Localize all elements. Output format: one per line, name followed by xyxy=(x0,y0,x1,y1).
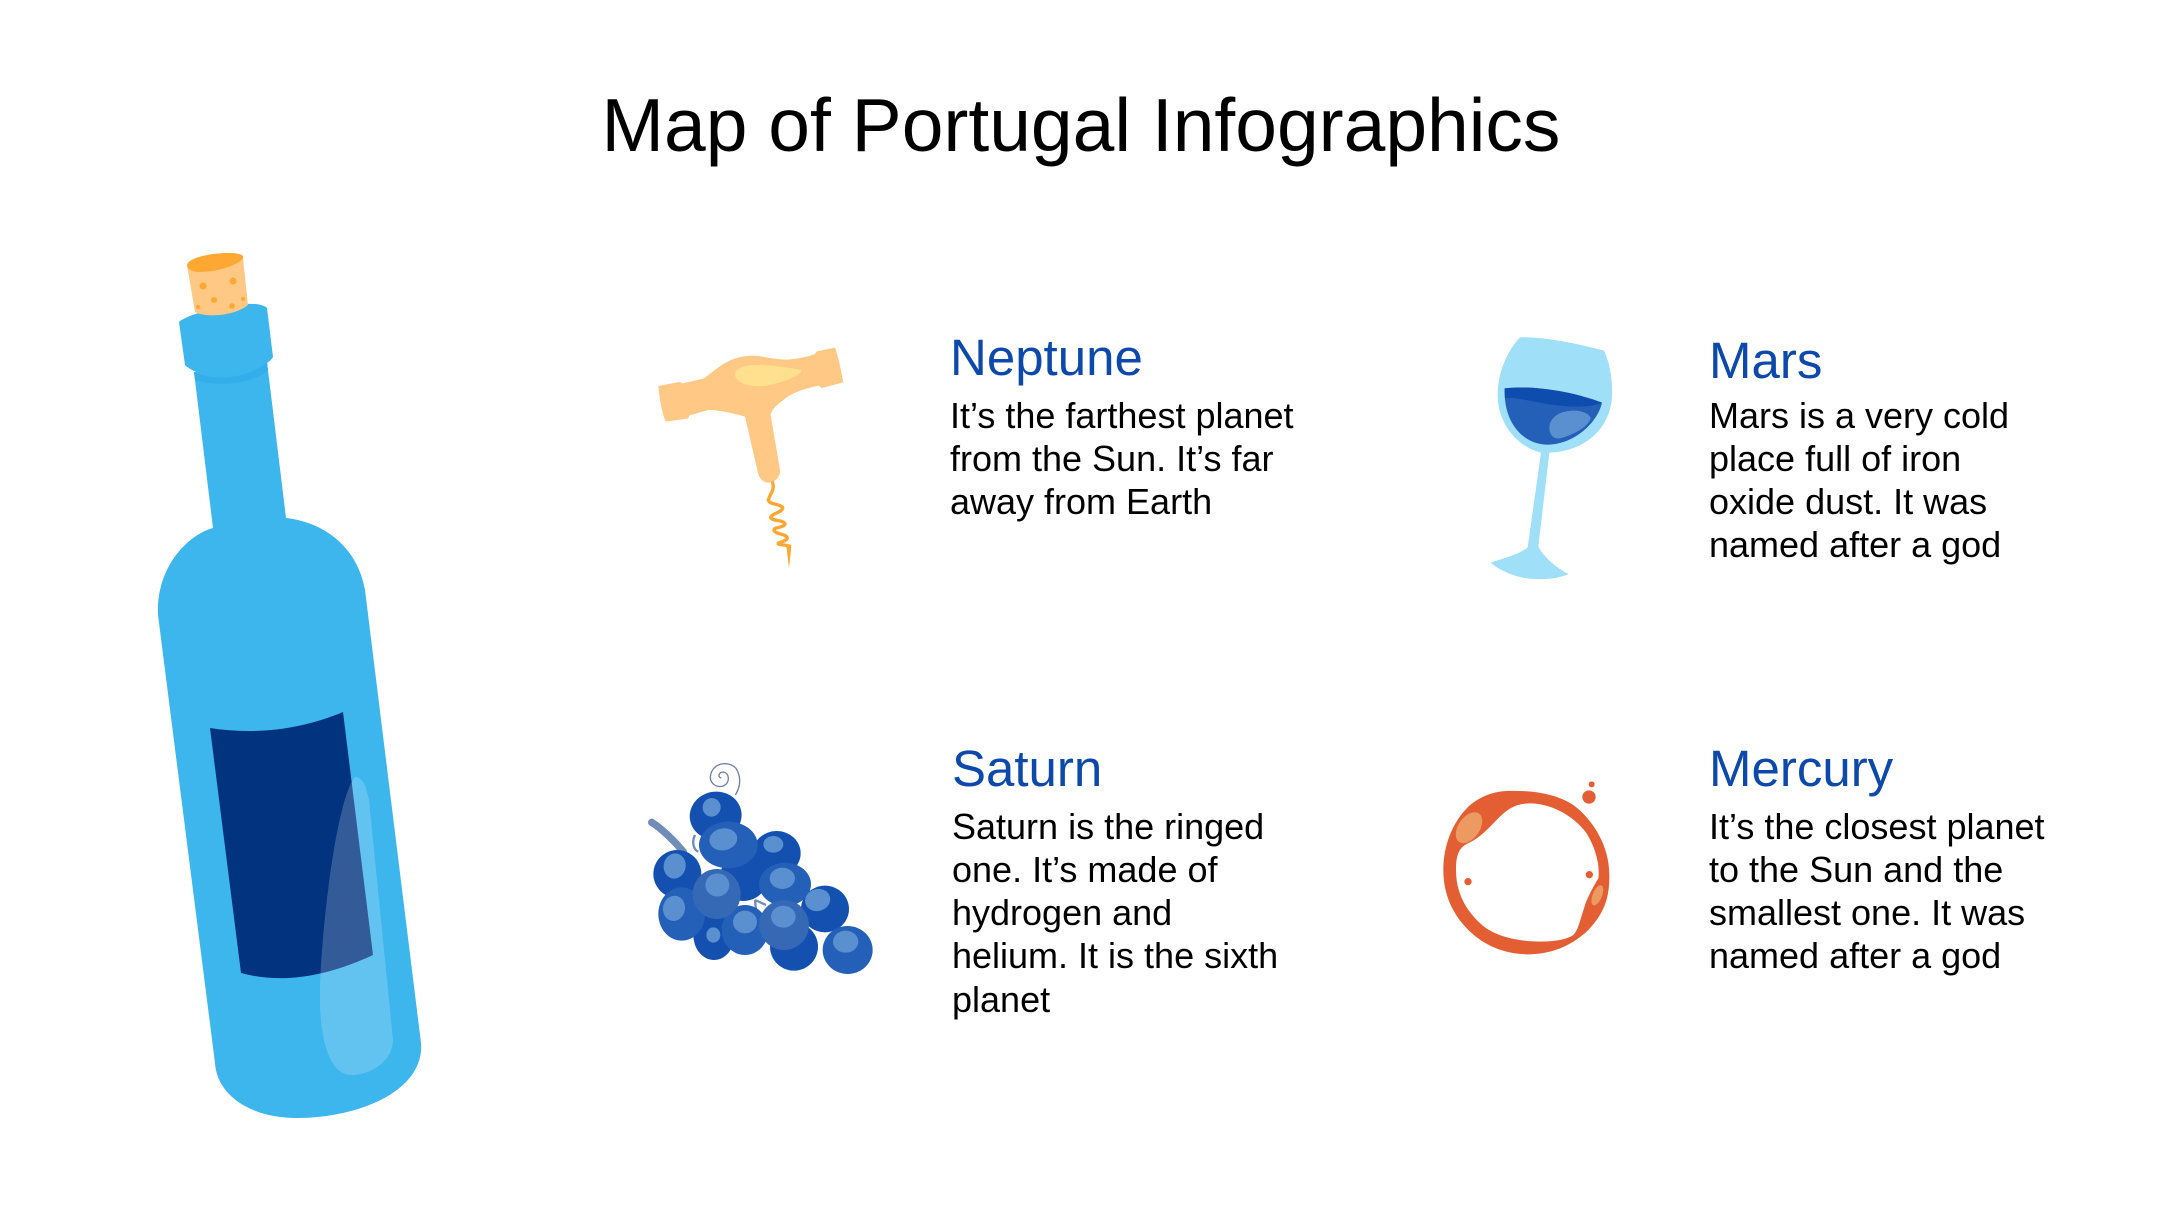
text block: Mercury: named after a god xyxy=(1709,935,2001,976)
text block: Neptune: away from Earth xyxy=(950,481,1212,522)
icon: grapes xyxy=(652,764,873,974)
text block: Mars: Mars is a very cold xyxy=(1709,394,2009,436)
icon: wine stain ring xyxy=(1443,781,1609,954)
text block: Mars: Mars xyxy=(1709,332,1822,389)
text block: Mercury: Mercury xyxy=(1709,740,1893,797)
text block: Mercury: to the Sun and the xyxy=(1709,849,2003,890)
text block: Neptune xyxy=(950,329,1294,522)
text block: Saturn: Saturn xyxy=(952,740,1102,797)
text block: Saturn: one. It’s made of xyxy=(952,849,1218,890)
text block: Mercury: It’s the closest planet xyxy=(1709,806,2045,846)
text block: Neptune: Neptune xyxy=(950,329,1143,386)
text block: Saturn: helium. It is the sixth xyxy=(952,935,1278,976)
text block: Saturn xyxy=(952,740,1278,1020)
text block: Mars: oxide dust. It was xyxy=(1709,481,1987,522)
icon: wine bottle xyxy=(158,253,421,1118)
text block: Saturn: Saturn is the ringed xyxy=(952,806,1264,846)
icon: corkscrew xyxy=(658,348,843,568)
icon: wine glass xyxy=(1491,337,1612,579)
text block: Mercury: smallest one. It was xyxy=(1709,892,2025,933)
text block: Mars: place full of iron xyxy=(1709,438,1961,479)
text block: Mars: named after a god xyxy=(1709,524,2001,565)
text block: Saturn: hydrogen and xyxy=(952,892,1172,933)
text block: Saturn: planet xyxy=(952,979,1050,1020)
text block: Mercury xyxy=(1709,740,2045,976)
text block: Mars xyxy=(1709,332,2009,565)
text block: Neptune: from the Sun. It’s far xyxy=(950,438,1273,479)
title: Map of Portugal Infographics xyxy=(602,83,1560,167)
text block: Neptune: It’s the farthest planet xyxy=(950,394,1294,436)
